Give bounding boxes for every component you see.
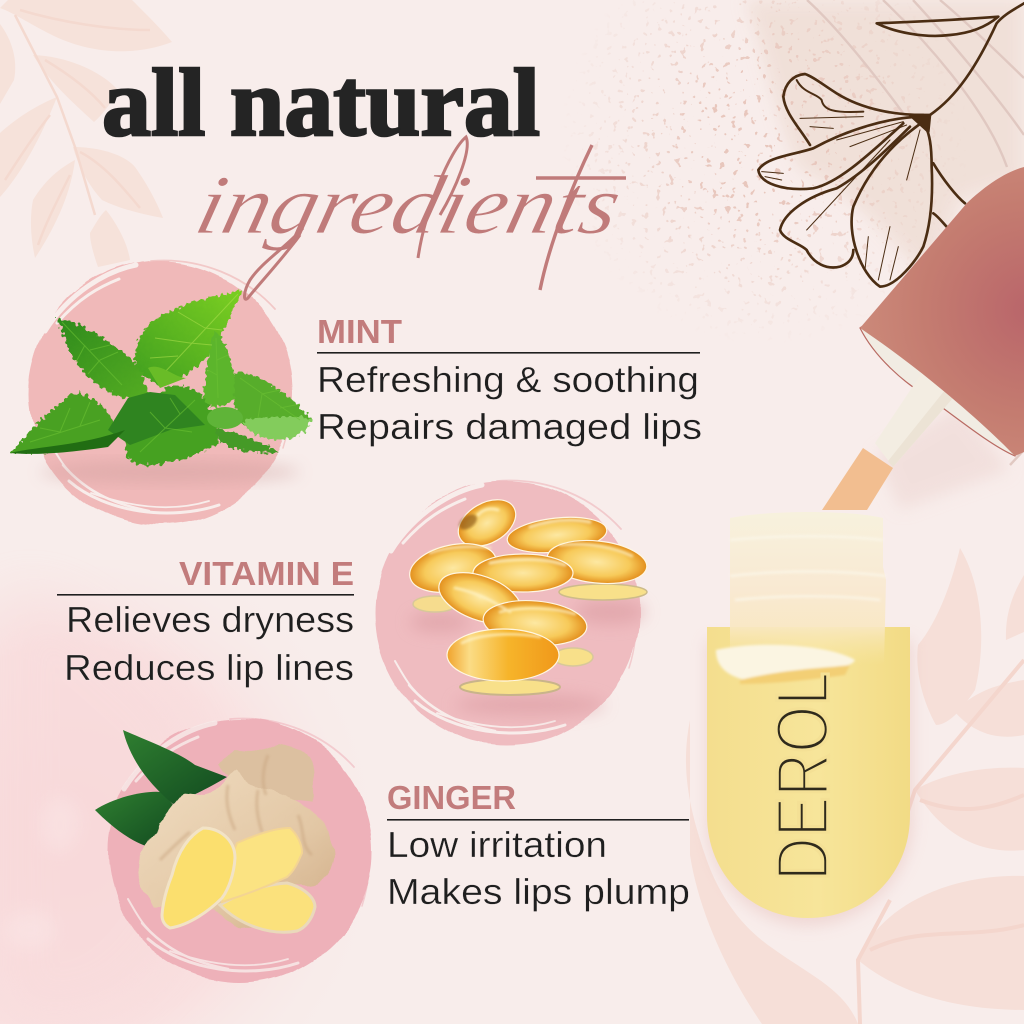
cap body: [860, 167, 1024, 456]
watercolor wash: bottom left: [0, 560, 420, 1024]
capsule reflections: [413, 584, 647, 695]
ginger leaves: [95, 730, 227, 848]
ginger line 1: Low irritation: [387, 824, 607, 865]
cap inner rim: [860, 300, 1024, 456]
bottle neck: [730, 512, 886, 665]
wand applicator tip: [822, 448, 893, 510]
vitamin E text block: [57, 555, 354, 688]
decorative fine lines: top right: [807, 0, 1024, 465]
ginger root: [138, 745, 335, 930]
ginger text block: [387, 779, 690, 912]
panel: mint: [10, 260, 312, 525]
vitamin E line 2: Reduces lip lines: [64, 647, 354, 688]
panel: ginger: [95, 718, 372, 983]
mint drop shadow: [40, 461, 300, 483]
decorative leaves: bottom right: [686, 548, 1024, 1024]
title: ingredients script: ingredients: [187, 159, 630, 252]
decorative speckles: [584, 0, 930, 322]
capsule shadows: [410, 600, 645, 715]
title: all natural: all natural: [102, 49, 540, 156]
watercolor wash: top right: [745, 0, 1024, 280]
decorative leaves: top left: [0, 0, 172, 267]
bottle shadow: [707, 640, 912, 925]
capsules: [405, 490, 649, 681]
bottle body: [707, 627, 910, 918]
ginger heading: GINGER: [387, 779, 516, 816]
brand label: DEROL: [761, 672, 844, 881]
capsule dark core: [456, 511, 480, 533]
flower line drawing: [758, 3, 1024, 287]
ginger slices: [162, 828, 315, 932]
vitamin E brush circle: [375, 480, 639, 745]
vitamin E heading: VITAMIN E: [179, 555, 354, 592]
wand stem: [875, 371, 953, 467]
mint heading: MINT: [317, 313, 402, 350]
mint line 1: Refreshing & soothing: [317, 359, 699, 400]
mint leaves: [10, 290, 312, 465]
panel: vitamin E: [375, 480, 649, 745]
neck thread bands: [730, 536, 886, 600]
ginger brush circle: [108, 718, 372, 983]
wand shadow: [875, 405, 1010, 510]
lip gloss cap with wand: [822, 167, 1024, 510]
mint line 2: Repairs damaged lips: [317, 406, 702, 447]
liquid level highlight: [716, 645, 855, 684]
mint text block: [317, 313, 702, 447]
title: ingredients script: [187, 137, 630, 299]
capsule highlights: [430, 509, 632, 643]
vitamin E line 1: Relieves dryness: [66, 599, 354, 640]
bottle: [707, 512, 912, 925]
mint brush circle: [29, 260, 293, 525]
ginger line 2: Makes lips plump: [387, 871, 690, 912]
